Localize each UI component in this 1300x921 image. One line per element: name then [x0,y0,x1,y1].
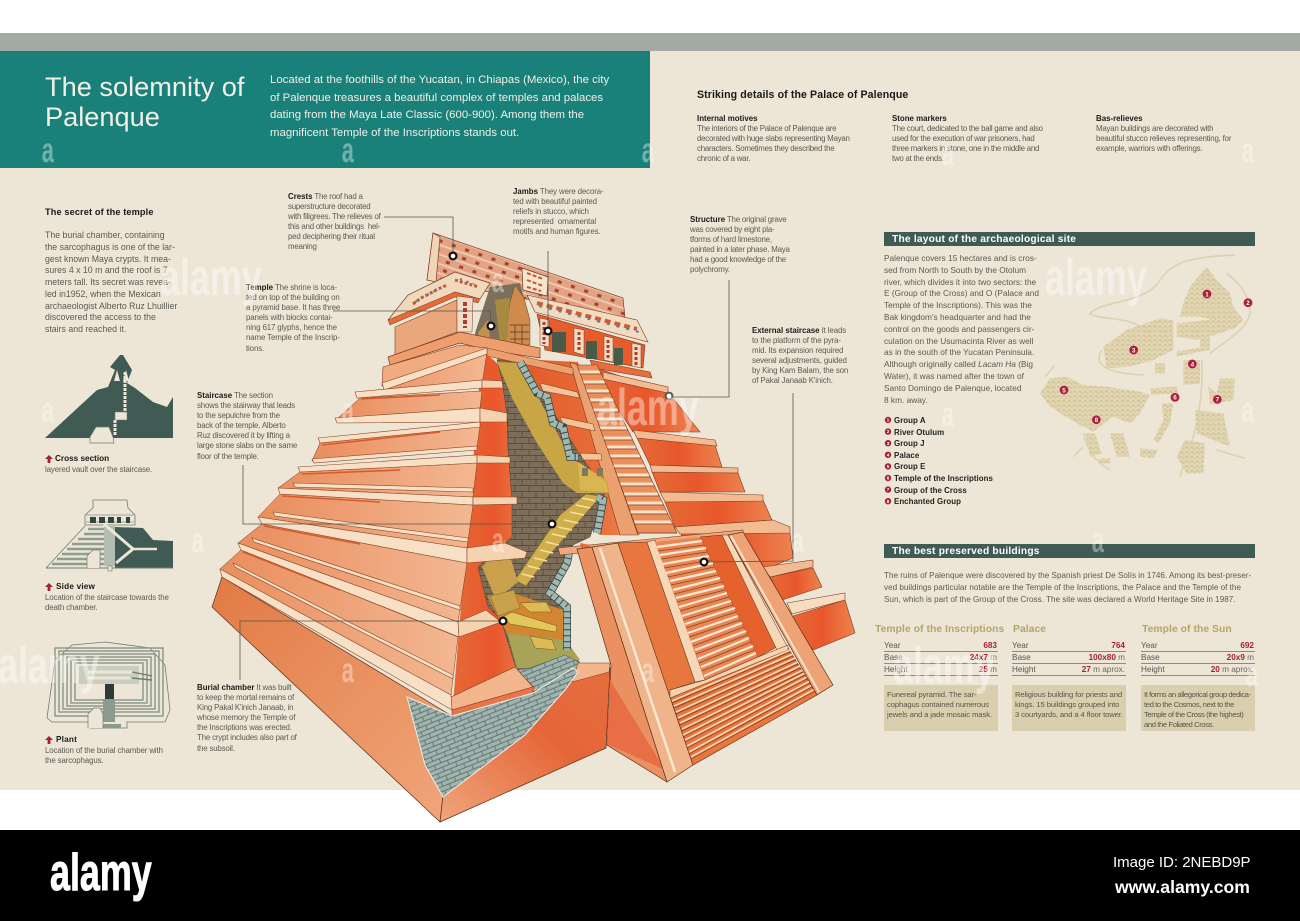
callout: burial chamber: to keep the mortal remains of [197,693,294,702]
intro text: of Palenque treasures a beautiful complex of temples and palaces [270,92,603,104]
watermark layer: a [792,521,804,560]
text: bas-reliefs: example, warriors with offerings. [1096,144,1202,153]
watermark layer: alamy [597,379,699,437]
callout: temple [246,283,340,353]
map: archaeological site: 4 [1191,361,1195,368]
legend markers: 6 [887,476,890,481]
callout: temple: tions. [246,344,264,353]
leader: crests [384,217,456,259]
note box: and the Foliated Cross. [1144,720,1214,729]
text: bas-reliefs: Mayan buildings are decorated with [1096,124,1213,133]
text: stone markers: used for the execution of war prisoners, had [892,134,1035,143]
callout: burial chamber: The crypt includes also part of [197,733,297,742]
note box [1141,685,1255,731]
upper staircase [487,348,677,535]
row: base: 20x9 m [1227,653,1254,662]
watermark layer: alamy [893,637,995,695]
right balustrade [728,532,833,695]
map: archaeological site: 8 [1095,417,1099,424]
callout: crests: meaning [288,242,317,251]
title [45,71,244,132]
watermark layer: alamy [1045,249,1147,307]
callout: temple: ted on top of the building on [246,293,340,302]
watermark layer: alamy [160,249,262,307]
map: archaeological site: 1 [1205,291,1209,298]
callout: burial chamber: the Inscriptions was erected. [197,723,292,732]
icon: plant [46,642,170,728]
legend markers: 2 [887,429,890,434]
leader: external staircase [701,393,793,565]
table title: Palace [1013,624,1046,635]
brick wall [478,360,606,690]
image id: Image ID: 2NEBD9P [1113,854,1251,871]
watermark layer: a [1092,521,1104,560]
title: The solemnity of [45,71,244,102]
text: stone markers [892,114,1043,163]
callout: burial chamber: the subsoil. [197,744,235,753]
table: Temple of the Sun [1141,624,1255,731]
icon: cross section [45,355,173,444]
website: www.alamy.com [1115,877,1250,897]
label: side view [45,582,169,612]
row: year [1141,640,1255,652]
watermark layer: a [642,651,654,690]
row: height: Height [1012,665,1036,674]
watermark layer: a [42,131,54,170]
description: Location of the staircase towards the [45,593,169,602]
watermark layer: a [492,521,504,560]
text: best preserved body [884,571,1251,604]
red corner panels backing [452,350,535,716]
section bar: best preserved: The best preserved buildings [892,546,1040,557]
text: bas-reliefs: Bas-relieves [1096,114,1143,123]
callout: crests: superstructure decorated [288,202,370,211]
text: layout body: sed from North to South by the Otolum [884,265,1026,275]
left face tiers [220,348,535,716]
legend labels: Group A [894,416,926,425]
text: best preserved body: The ruins of Palenque were discovered by the Spanish priest De Solís in 1746. Among its best-preser- [884,571,1251,580]
callout: jambs: reliefs in stucco, which [513,207,589,216]
text: secret body: the sarcophagus is one of the lar- [45,242,175,252]
row: height: Height [884,665,908,674]
row: year: Year [1012,641,1029,650]
text: secret body: led in1952, when the Mexican [45,289,161,299]
legend markers: 5 [887,464,890,469]
icon: arrow [45,736,53,744]
watermark layer: a [342,131,354,170]
row: base: Base [1141,653,1160,662]
table title: Temple of the Sun [1142,624,1232,635]
note box: Religious building for priests and [1015,690,1122,699]
text: internal motives [697,114,850,163]
legend labels: Palace [894,451,919,460]
panel: the secret of the temple [45,207,178,334]
panel: striking details [697,89,1232,163]
row: year: 683 [983,641,997,650]
text: secret body: discovered the access to the [45,312,156,322]
heading: striking details: Striking details of the Palace of Palenque [697,89,908,101]
watermark layer: a [1242,391,1254,430]
description: death chamber. [45,603,98,612]
icon: side view [46,500,173,572]
watermark layer: a [1242,131,1254,170]
callout: structure: polychromy. [690,265,730,274]
label text: Side view [56,582,95,591]
row: year: 692 [1240,641,1254,650]
stair down to the crypt [515,494,601,586]
label text: Plant [56,735,77,744]
callout: crests: this and other buildings hel- [288,222,380,231]
text: stone markers: three markers in stone, one in the middle and [892,144,1039,153]
base shelf [451,667,533,710]
note box: jewels and a jade mosaic mask. [887,710,992,719]
icon: arrow [45,455,53,463]
note box: It forms an allegorical group dedica- [1144,690,1251,699]
text: layout body: Temple of the Inscriptions). This was the [884,300,1032,310]
base masonry [407,668,578,797]
text: best preserved body: Sun, which is part of the Group of the Cross. The site was declared a World Heritage Site in 1987. [884,595,1236,604]
callout: structure [690,215,790,274]
text: secret body: The burial chamber, containing [45,230,165,240]
row: year: Year [884,641,901,650]
callout: staircase: large stone slabs on the same [197,441,297,450]
callout: temple: a pyramid base. It has three [246,303,340,312]
text: stone markers: The court, dedicated to the ball game and also [892,124,1043,133]
legend labels: River Otulum [894,428,944,437]
callout: structure: painted in a later phase. Maya [690,245,790,254]
temple on top [382,233,652,386]
legend labels: Group of the Cross [894,486,967,495]
text: layout body: E (Group of the Cross) and O (Palace and [884,288,1039,298]
callout: crests [288,192,381,251]
text: layout body: Although originally called Lacam Ha (Big [884,359,1033,369]
watermark layer: a [642,131,654,170]
callout: staircase: to the sepulchre from the [197,411,280,420]
callout: jambs: ted with beautiful painted [513,197,597,206]
table: Temple of the Inscriptions [875,624,1004,731]
text: layout body [884,253,1039,405]
map: archaeological site: 2 [1246,300,1250,307]
row: base: Base [1012,653,1031,662]
burial chamber [482,540,518,600]
text: layout body: Santo Domingo de Palenque, located [884,383,1021,393]
text: layout body: Bak kingdom's headquarter and had the [884,312,1031,322]
row: height: Height [1141,665,1165,674]
leader: burial chamber [240,618,506,680]
section bar: layout: The layout of the archaeological site [892,234,1076,245]
callout: crests: ped deciphering their ritual [288,232,375,241]
row: base: 100x80 m [1089,653,1125,662]
watermark layer: alamy [0,637,100,695]
row: year [884,640,998,652]
text: stone markers: two at the ends. [892,154,944,163]
text: secret body: archaeologist Alberto Ruz Lhuillier [45,300,177,310]
text: layout body: culation on the Usumacinta River as well [884,336,1033,346]
legend markers [884,416,892,504]
temple plinth [388,332,540,365]
text: secret body: meters tall. Its secret was revea- [45,277,171,287]
text: layout body: river, which divides it into two sectors: the [884,277,1036,287]
note box: 3 courtyards, and a 4 floor tower. [1015,710,1123,719]
watermark layer: a [1246,655,1258,694]
leader: temple [333,311,494,329]
row: base: 24x7 m [970,653,997,662]
text: internal motives: The interiors of the Palace of Palenque are [697,124,836,133]
callout: temple: Temple The shrine is loca- [246,283,337,292]
yellow vault [497,362,610,493]
text: secret body [45,230,178,334]
note box: ted to the Cosmos, next to the [1144,700,1234,709]
stair buttress [577,547,667,782]
callout: temple: name Temple of the Inscrip- [246,333,340,342]
text: layout body: 8 km. away. [884,395,928,405]
callout: structure: tforms of hard limestone, [690,235,772,244]
callout: structure: Structure The original grave [690,215,786,224]
footer black bar [0,830,1300,921]
description: layered vault over the staircase. [45,465,152,474]
intro text: dating from the Maya Late Classic (600-900). Among them the [270,109,584,121]
callout: jambs [513,187,604,236]
text: secret body: gest known Maya crypts. It mea- [45,254,171,264]
callout: staircase: Ruz discovered it by lifting a [197,431,290,440]
watermark layer: a [42,391,54,430]
watermark layer: a [942,395,954,434]
map: archaeological site: 7 [1216,397,1220,404]
callout: temple: panels with blocks contai- [246,313,333,322]
callout: staircase: floor of the temple. [197,452,259,461]
legend markers: 8 [887,499,890,504]
lower base [212,569,610,822]
row: base [1012,652,1126,664]
temple cut-open chamber [475,283,530,345]
heading: secret: The secret of the temple [45,207,154,217]
row: height: 20 m aprox. [1211,665,1254,674]
table title: Temple of the Inscriptions [875,624,1004,635]
intro text: magnificent Temple of the Inscriptions stands out. [270,126,519,138]
text: layout body: Water), it was named after the town of [884,371,1024,381]
row: year: 764 [1111,641,1125,650]
orange inner walls [618,542,695,765]
callout: jambs: represented ornamental [513,217,596,226]
front staircase structure [558,530,833,782]
callout: jambs: Jambs They were decora- [513,187,604,196]
top gray bar [0,33,1300,51]
masonry edge [520,362,603,650]
description: Location of the burial chamber with [45,746,163,755]
legend markers: 4 [887,452,890,457]
row: height [884,664,998,676]
row: height: 27 m aprox. [1082,665,1125,674]
base left side [212,577,452,822]
text: internal motives: characters. Sometimes they described the [697,144,834,153]
middle stair [655,537,758,680]
callout: burial chamber [197,683,297,753]
callout: external staircase: by King Kam Balam, the son [752,366,848,375]
temple left wall [395,300,457,355]
row: year: Year [1141,641,1158,650]
legend markers: 3 [887,441,890,446]
legend: map groups [884,416,993,506]
alamy logo: alamy [50,844,152,902]
intro text [270,74,610,138]
callout: external staircase: several adjustments, guided [752,356,847,365]
map: archaeological site: 3 [1132,347,1136,354]
row: base [1141,652,1255,664]
callout: external staircase [752,326,848,385]
row: year [1012,640,1126,652]
watermark layer: a [492,261,504,300]
table: Palace [1012,624,1126,731]
corner shelves [458,380,527,637]
watermark layer: a [942,134,954,173]
map: archaeological site [1040,254,1253,477]
leader: jambs [545,251,551,334]
row: base: Base [884,653,903,662]
row: height [1141,664,1255,676]
callout: external staircase: to the platform of the pyra- [752,336,841,345]
text: stone markers: Stone markers [892,114,947,123]
callout: burial chamber: King Pakal K'inich Janaab, in [197,703,293,712]
text: best preserved body: ved buildings particular notable are the Temple of the Inscriptions, the Palace and the Temple of the [884,583,1241,592]
text: layout body: as in the south of the Yucatan Peninsula. [884,347,1034,357]
note box: cophagus contained numerous [887,700,989,709]
callout: staircase [197,391,297,461]
temple right frieze and facade [527,295,648,342]
callout: temple: ning 617 glyphs, hence the [246,323,337,332]
callout: jambs: motifs and human figures. [513,227,601,236]
map: archaeological site: 6 [1173,395,1177,402]
text: internal motives: chronic of a war. [697,154,750,163]
legend markers: 1 [887,418,890,423]
watermark layer: a [342,391,354,430]
row: base [884,652,998,664]
label: plant [45,735,163,765]
section bar: layout [884,232,1255,246]
text: layout body: control on the goods and passengers cir- [884,324,1034,334]
callout: structure: had a good knowledge of the [690,255,786,264]
note box [884,685,998,731]
label: cross section [45,454,152,474]
legend labels: Enchanted Group [894,497,961,506]
text: secret body: stairs and reached it. [45,324,126,334]
description [45,593,169,612]
section bar: best preserved [884,544,1255,558]
base right side [440,668,610,822]
note box: kings. 15 buildings grouped into [1015,700,1119,709]
tier shadows under ledges [243,395,440,590]
callout: staircase: back of the temple. Alberto [197,421,286,430]
cutaway: stairway and burial chamber [478,360,610,690]
row: height [1012,664,1126,676]
text: bas-reliefs: beautiful stucco relieves representing, for [1096,134,1231,143]
icon: arrow [45,583,53,591]
leader: staircase [243,465,555,527]
callout: staircase: shows the stairway that leads [197,401,295,410]
temple left mansard with frieze [388,272,490,322]
callout: crests: Crests The roof had a [288,192,363,201]
watermark layer: a [192,521,204,560]
callout: structure: was covered by eight pla- [690,225,774,234]
legend markers: 7 [887,487,890,492]
legend labels: Temple of the Inscriptions [894,474,993,483]
callout: external staircase: of Pakal Janaab K'inich. [752,376,833,385]
text: internal motives: decorated with huge slabs representing Mayan [697,134,850,143]
title: Palenque [45,100,160,132]
description [45,746,163,765]
map: archaeological site: 5 [1062,387,1066,394]
description: the sarcophagus. [45,756,103,765]
label text: Cross section [55,454,109,463]
header panel [0,51,650,168]
callout: external staircase: mid. Its expansion required [752,346,843,355]
text: internal motives: Internal motives [697,114,758,123]
legend labels: Group J [894,439,925,448]
text: bas-reliefs [1096,114,1232,153]
text: secret body: sures 4 x 10 m and the roof is 7 [45,265,168,275]
callout: burial chamber: Burial chamber It was built [197,683,292,692]
callout: crests: with filigrees. The relieves of [288,212,381,221]
right face tiers [590,366,855,650]
tier lips [233,348,487,679]
legend labels: Group E [894,462,925,471]
intro text: Located at the foothills of the Yucatan, in Chiapas (Mexico), the city [270,74,609,86]
callout: burial chamber: whose memory the Temple of [197,713,295,722]
temple crest [427,233,625,318]
note box: Temple of the Cross (the highest) [1144,710,1243,719]
watermark layer: a [342,651,354,690]
note box [1012,685,1126,731]
row: height: 25 m [979,665,997,674]
text: layout body: Palenque covers 15 hectares and is cros- [884,253,1037,263]
leader: structure [666,280,729,399]
tier risers [220,352,487,695]
callout: staircase: Staircase The section [197,391,273,400]
callout: external staircase: External staircase It leads [752,326,846,335]
note box: Funereal pyramid. The sar- [887,690,976,699]
lower stair [670,648,817,765]
legend labels [894,416,993,506]
